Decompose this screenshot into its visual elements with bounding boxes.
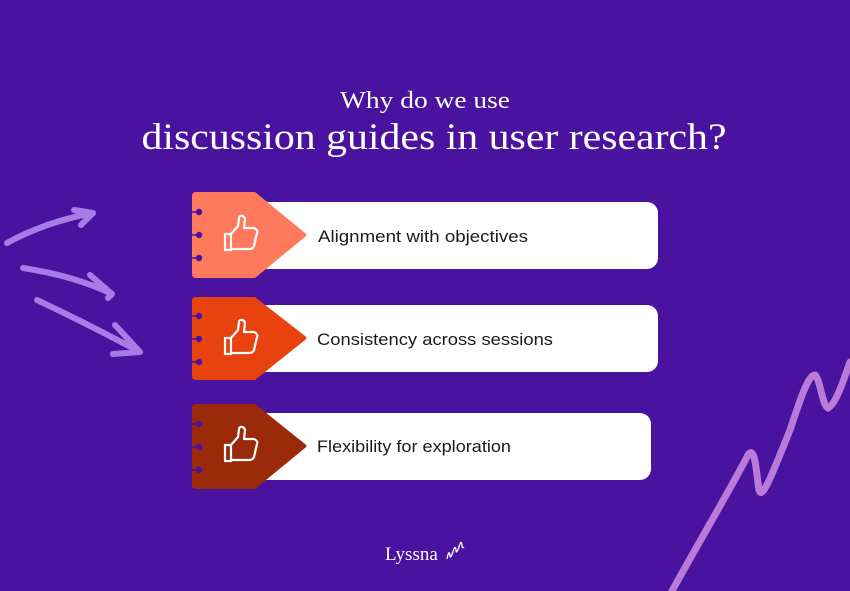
item 3: flexibility: Flexibility for exploration: [317, 437, 511, 456]
title: [142, 88, 726, 158]
title: discussion guides in user research?: [142, 117, 726, 158]
title: Why do we use: [340, 88, 510, 114]
item 1: alignment: Alignment with objectives: [318, 227, 528, 246]
item 1: alignment: [192, 192, 658, 278]
logo: Lyssna: [385, 544, 438, 565]
arrows decoration left: [7, 210, 140, 354]
item 2: consistency: [192, 297, 658, 380]
item 3: flexibility: [192, 404, 651, 489]
squiggle decoration right: [672, 362, 850, 591]
logo: [385, 542, 464, 565]
item 2: consistency: Consistency across sessions: [317, 330, 553, 349]
